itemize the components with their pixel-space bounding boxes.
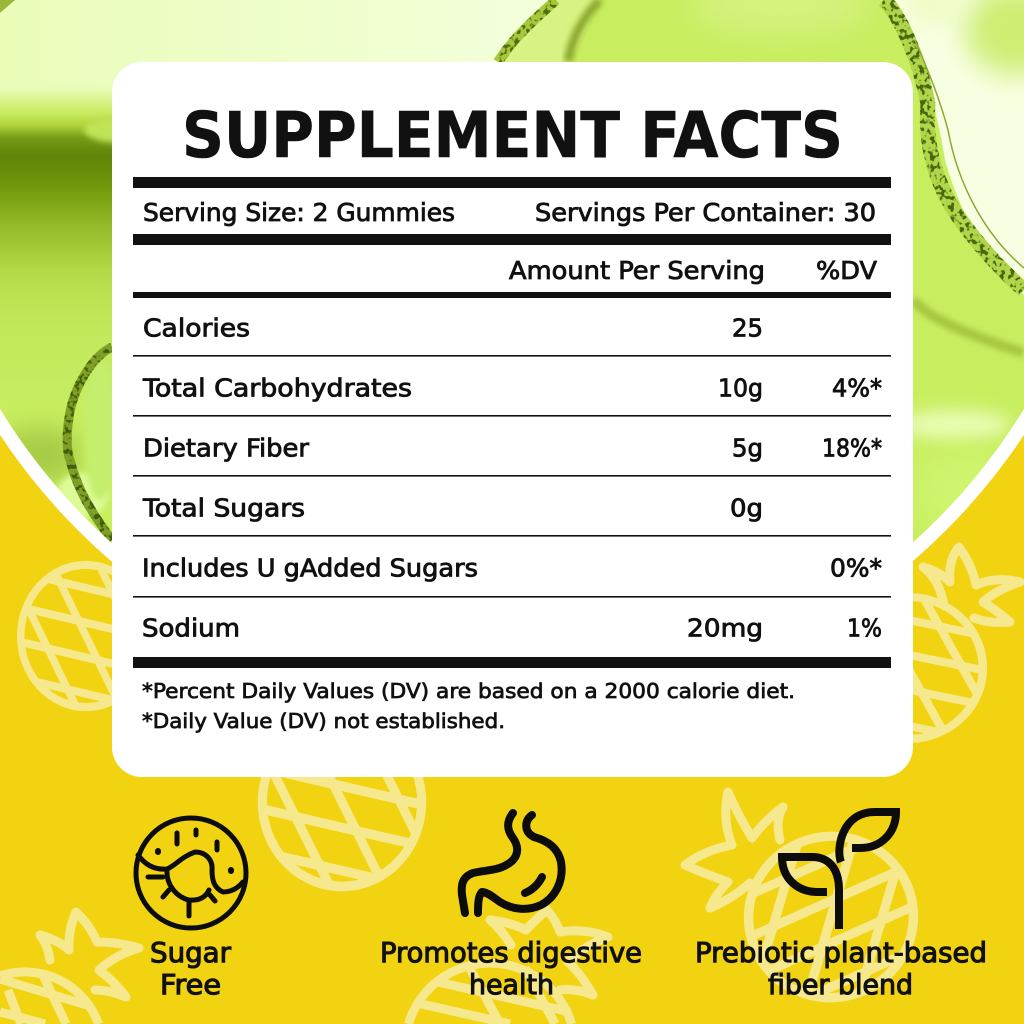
label: digestive health: Promotes digestive (380, 937, 642, 969)
row: total sugars: 0g (730, 494, 763, 522)
pale top band (0, 0, 558, 84)
top middle soft tones (498, 0, 600, 62)
title: SUPPLEMENT FACTS (182, 99, 843, 172)
label: prebiotic fiber blend: Prebiotic plant-based (695, 937, 987, 969)
label: sugar free (150, 937, 232, 1001)
label: digestive health (380, 937, 642, 1001)
pineapple: below card centre (240, 705, 448, 899)
row: calories: 25 (732, 314, 763, 342)
row: dietary fiber: 5g (732, 434, 763, 462)
footnotes: *Percent Daily Values (DV) are based on a 2000 calorie diet. (142, 679, 795, 703)
row: total carbohydrates: Total Carbohydrates (142, 374, 412, 402)
serving info row: Serving Size: 2 Gummies (143, 198, 455, 227)
row: sodium: 20mg (687, 614, 763, 642)
pale pocket right of glass (892, 0, 1024, 295)
serving info row (143, 198, 876, 227)
row: total carbohydrates: 10g (718, 374, 763, 402)
pineapple: bottom left (0, 912, 139, 1024)
footnotes (142, 679, 795, 733)
row: total sugars: Total Sugars (142, 494, 305, 522)
row: added sugars: 0%* (830, 554, 882, 582)
column headers (509, 256, 877, 285)
pineapple: bottom right behind leaf icon (685, 792, 954, 1024)
pineapple pattern (0, 547, 1020, 1024)
row: calories: Calories (143, 314, 250, 342)
row: dietary fiber (143, 434, 882, 462)
footnotes: *Daily Value (DV) not established. (142, 709, 505, 733)
label: prebiotic fiber blend (695, 937, 987, 1001)
label: digestive health: health (469, 969, 554, 1001)
left gradient strip (0, 84, 113, 312)
label: sugar free: Free (160, 969, 221, 1001)
row: added sugars (142, 554, 882, 582)
row: calories (143, 314, 763, 342)
left lower tones (0, 427, 82, 483)
icon: plant sprout (782, 812, 896, 929)
row: total sugars (142, 494, 763, 522)
icon: stomach (462, 813, 562, 913)
row: sodium: Sodium (142, 614, 240, 642)
right lower tones (900, 410, 1010, 440)
icon: sugar free donut (136, 818, 246, 928)
pineapple: bottom centre (408, 910, 608, 1024)
pineapple: right of card (812, 547, 1020, 749)
white arc band (0, 0, 1024, 710)
row: dietary fiber: 18%* (822, 434, 882, 462)
column headers: %DV (816, 256, 877, 285)
column headers: Amount Per Serving (509, 256, 765, 285)
panel: supplement facts card (112, 62, 913, 777)
label: prebiotic fiber blend: fiber blend (768, 969, 913, 1001)
serving info row: Servings Per Container: 30 (535, 198, 876, 227)
glass edges (67, 0, 1024, 540)
row: total carbohydrates: 4%* (832, 374, 882, 402)
row: total carbohydrates (142, 374, 882, 402)
row: dietary fiber: Dietary Fiber (143, 434, 310, 462)
pineapple: left of card (2, 555, 173, 717)
row: added sugars: Includes U gAdded Sugars (142, 554, 478, 582)
row: sodium (142, 614, 882, 642)
label: sugar free: Sugar (150, 937, 232, 969)
green gel photo backdrop (0, 0, 1024, 544)
table rules (133, 177, 891, 668)
row: sodium: 1% (847, 614, 882, 642)
